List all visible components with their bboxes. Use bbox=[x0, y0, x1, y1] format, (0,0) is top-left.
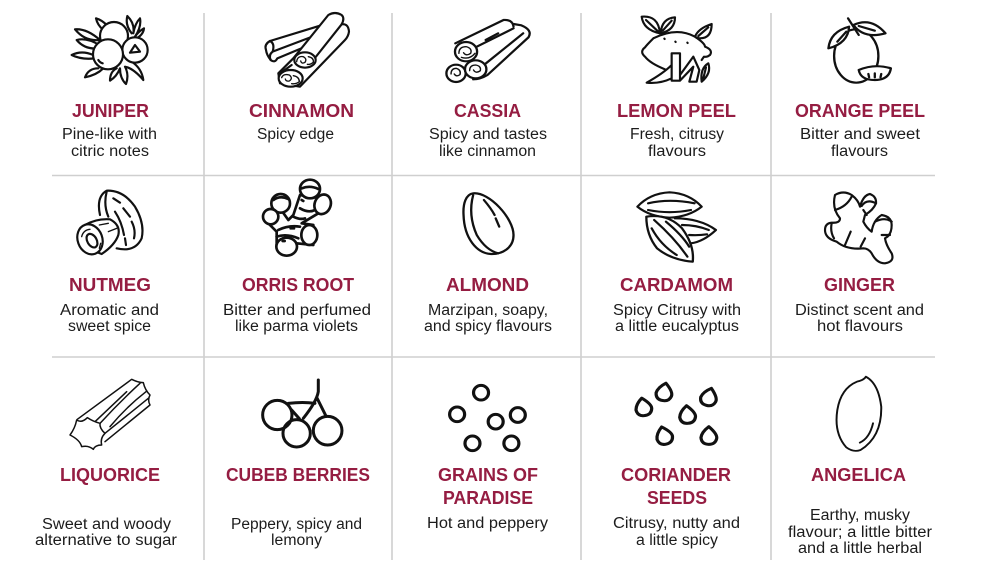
icon: lemon and peel bbox=[642, 17, 712, 83]
icon: grains bbox=[450, 385, 525, 451]
panel: coriander seeds bbox=[613, 382, 740, 549]
description bbox=[613, 515, 740, 549]
heading: ORANGE PEEL bbox=[795, 100, 925, 121]
description bbox=[788, 507, 932, 557]
icon: orange with segment bbox=[828, 18, 891, 83]
description: Hot and peppery bbox=[427, 515, 548, 532]
description: alternative to sugar bbox=[35, 532, 177, 549]
description bbox=[62, 126, 157, 160]
heading: SEEDS bbox=[647, 487, 707, 508]
description bbox=[429, 126, 547, 160]
description: flavours bbox=[648, 143, 706, 160]
panel: lemon peel bbox=[617, 17, 736, 160]
description bbox=[35, 516, 177, 549]
description: Fresh, citrusy bbox=[630, 126, 724, 143]
description: Earthy, musky bbox=[810, 507, 910, 524]
heading: NUTMEG bbox=[69, 274, 151, 295]
heading: ORRIS ROOT bbox=[242, 274, 355, 295]
panel: grains of paradise bbox=[427, 385, 548, 532]
panel: nutmeg bbox=[60, 191, 159, 335]
heading: ALMOND bbox=[446, 274, 529, 295]
description: Bitter and perfumed bbox=[223, 302, 371, 319]
description: Spicy and tastes bbox=[429, 126, 547, 143]
heading: CINNAMON bbox=[249, 100, 354, 121]
description: Sweet and woody bbox=[42, 516, 171, 533]
panel: liquorice bbox=[35, 379, 177, 549]
description: hot flavours bbox=[817, 318, 903, 335]
icon: angelica seed bbox=[837, 377, 881, 451]
heading: CASSIA bbox=[454, 100, 521, 121]
description: a little spicy bbox=[636, 532, 718, 549]
description: flavours bbox=[831, 143, 888, 160]
description bbox=[424, 302, 552, 335]
description bbox=[223, 302, 371, 335]
description: lemony bbox=[271, 532, 322, 549]
description bbox=[630, 126, 724, 160]
icon: cinnamon sticks bbox=[265, 13, 349, 87]
description: citric notes bbox=[71, 143, 149, 160]
panel: cinnamon bbox=[249, 13, 354, 143]
description: and a little herbal bbox=[798, 540, 922, 557]
heading: CARDAMOM bbox=[620, 274, 733, 295]
description bbox=[60, 302, 159, 335]
heading: CUBEB BERRIES bbox=[226, 464, 370, 485]
description: Spicy Citrusy with bbox=[613, 302, 741, 319]
description: Bitter and sweet bbox=[800, 126, 921, 143]
description: like cinnamon bbox=[439, 143, 536, 160]
description: Spicy edge bbox=[257, 126, 334, 143]
description bbox=[231, 516, 362, 549]
description: Marzipan, soapy, bbox=[428, 302, 548, 319]
description bbox=[800, 126, 921, 160]
icon: cassia sticks bbox=[446, 20, 530, 82]
panel: orris root bbox=[223, 180, 371, 335]
description: Aromatic and bbox=[60, 302, 159, 319]
heading: CORIANDER bbox=[621, 464, 731, 485]
icon: nutmeg bbox=[73, 191, 142, 258]
icon: cardamom pods bbox=[637, 192, 716, 262]
panel: angelica bbox=[788, 377, 932, 557]
description: Distinct scent and bbox=[795, 302, 924, 319]
description bbox=[795, 302, 924, 335]
icon: orris root bbox=[263, 180, 334, 256]
heading: GINGER bbox=[824, 274, 895, 295]
icon: cubeb berries bbox=[263, 380, 342, 447]
description: and spicy flavours bbox=[424, 318, 552, 335]
description: like parma violets bbox=[235, 318, 358, 335]
icon: ginger bbox=[825, 192, 892, 263]
panel: orange peel bbox=[795, 18, 925, 160]
heading: PARADISE bbox=[443, 487, 533, 508]
panel: juniper bbox=[62, 16, 157, 160]
heading: ANGELICA bbox=[811, 464, 906, 485]
description bbox=[613, 302, 741, 335]
icon: liquorice root bbox=[70, 379, 150, 449]
description: Peppery, spicy and bbox=[231, 516, 362, 533]
description: flavour; a little bitter bbox=[788, 524, 932, 541]
heading: LIQUORICE bbox=[60, 464, 160, 485]
icon: coriander seeds bbox=[634, 382, 719, 446]
heading: LEMON PEEL bbox=[617, 100, 736, 121]
heading bbox=[438, 464, 538, 508]
description: a little eucalyptus bbox=[615, 318, 739, 335]
description: sweet spice bbox=[68, 318, 151, 335]
heading: GRAINS OF bbox=[438, 464, 538, 485]
description: Citrusy, nutty and bbox=[613, 515, 740, 532]
heading bbox=[621, 464, 731, 508]
panel: cubeb berries bbox=[226, 380, 370, 549]
description: Pine-like with bbox=[62, 126, 157, 143]
heading: JUNIPER bbox=[72, 100, 149, 121]
icon: juniper berries bbox=[72, 16, 148, 84]
panel: cardamom bbox=[613, 192, 741, 335]
panel: almond bbox=[424, 193, 552, 335]
panel: cassia bbox=[429, 20, 547, 160]
icon: almond bbox=[463, 193, 514, 254]
panel: ginger bbox=[795, 192, 924, 335]
